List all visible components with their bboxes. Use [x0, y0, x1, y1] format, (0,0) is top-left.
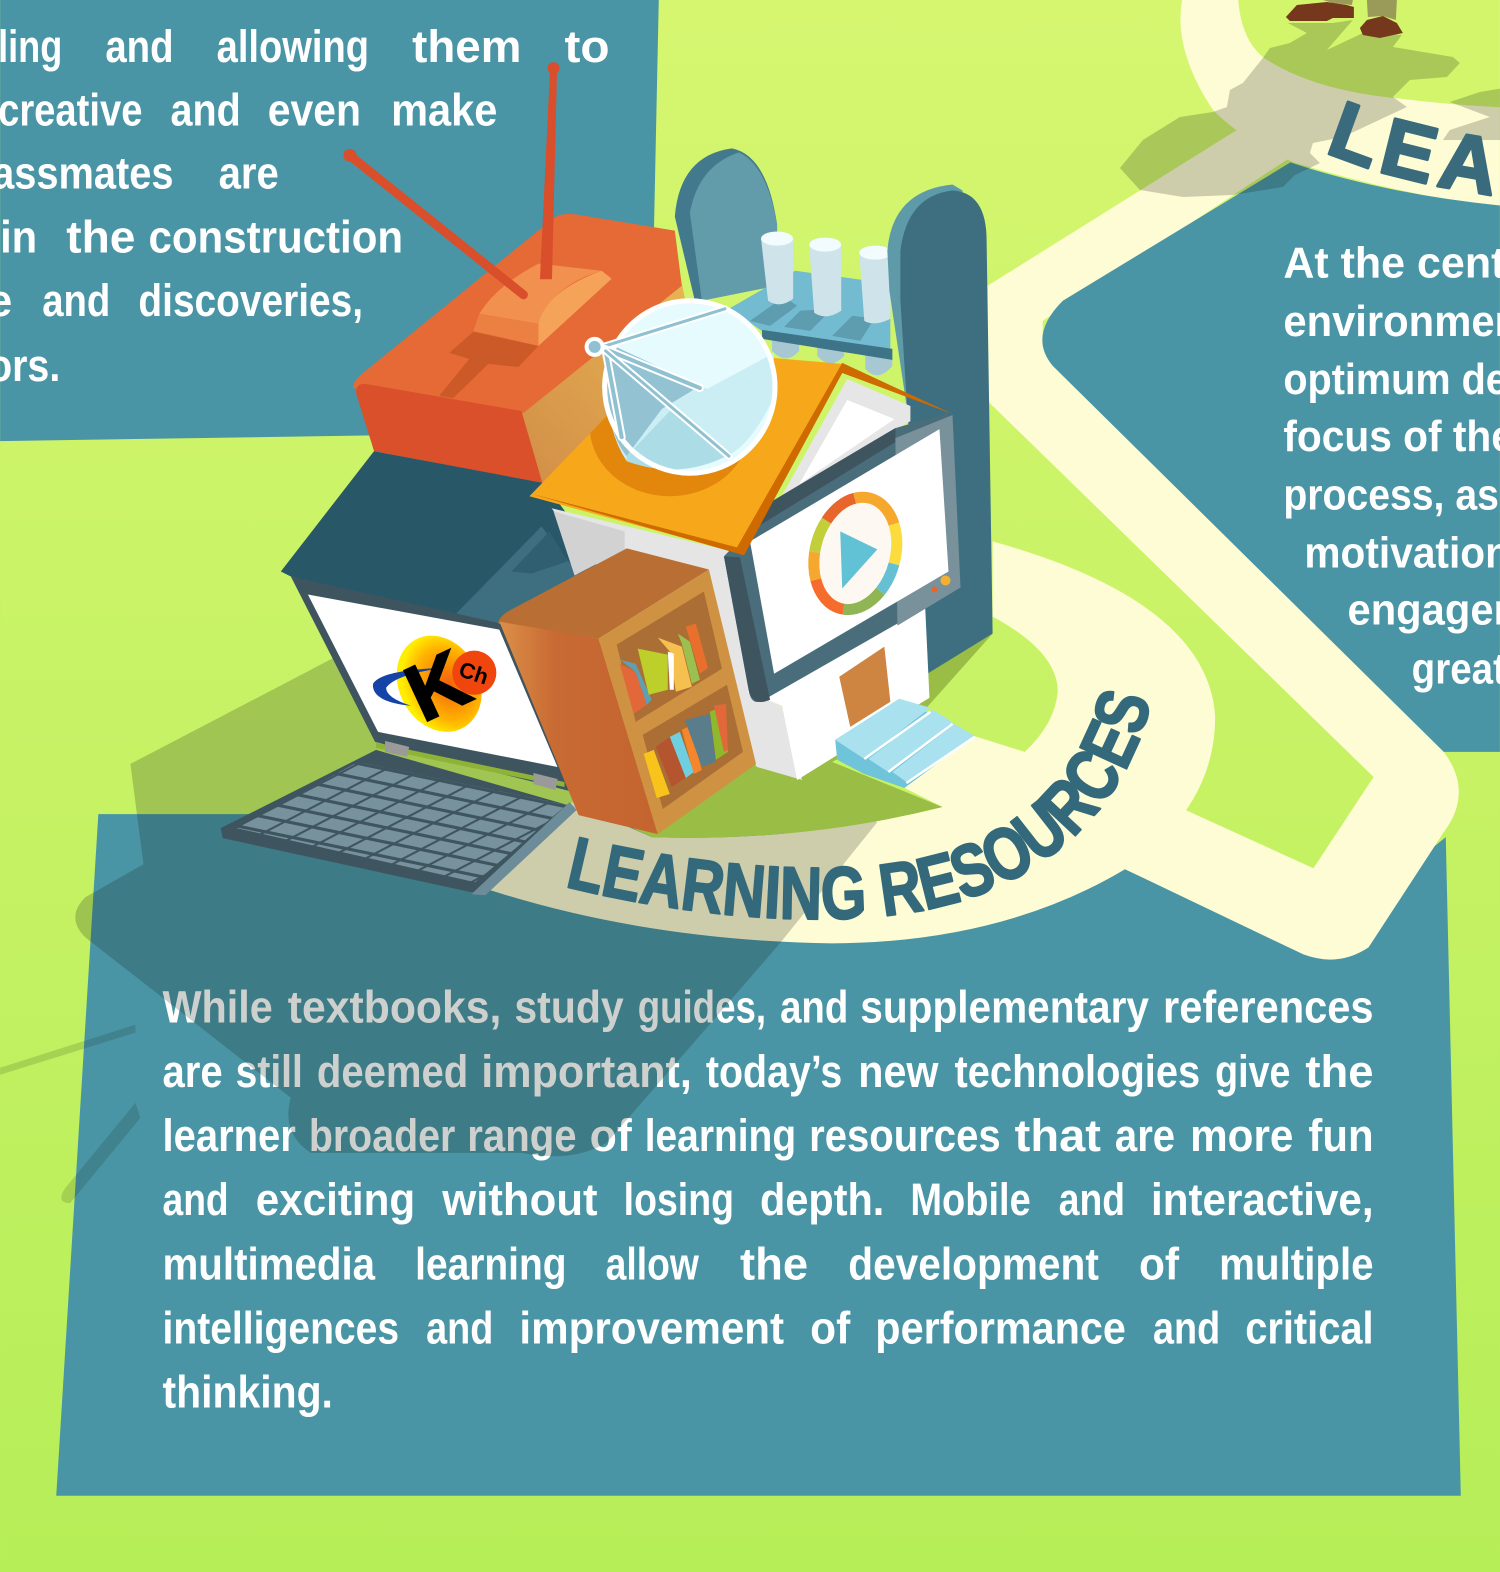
text: bottom paragraph: new [858, 1046, 939, 1097]
KCh logo [373, 621, 498, 747]
text: bottom paragraph: still [236, 1046, 303, 1097]
text: bottom paragraph: allow [606, 1238, 700, 1289]
text: top-left paragraph: and [105, 21, 174, 72]
door [839, 647, 890, 727]
text: bottom paragraph: more [1190, 1110, 1293, 1161]
text: bottom paragraph: without [441, 1174, 598, 1225]
antennas [343, 62, 560, 295]
laptop keyboard [221, 741, 577, 895]
orange roof [529, 356, 953, 555]
panel: bottom text background [56, 814, 1461, 1496]
text: bottom paragraph: learner [163, 1110, 296, 1161]
orange tv box on top [353, 214, 692, 483]
text: bottom paragraph: thinking. [163, 1367, 333, 1418]
text: top-left paragraph: them [412, 21, 521, 72]
text: top-left paragraph: allowing [217, 21, 369, 72]
panel: right text background [1042, 162, 1500, 752]
text: bottom paragraph: and [426, 1302, 493, 1353]
text: bottom paragraph: are [1115, 1110, 1175, 1161]
panel: top-left text background [0, 0, 659, 441]
text: bottom paragraph: depth. [760, 1174, 884, 1225]
text: bottom paragraph: of [810, 1302, 851, 1353]
text: top-left paragraph: make [391, 84, 497, 135]
house walls [551, 508, 929, 780]
text: bottom paragraph: deemed [317, 1046, 468, 1097]
text: bottom paragraph: give [1215, 1046, 1290, 1097]
text: bottom paragraph: the [1305, 1046, 1374, 1097]
KCh logo: K [392, 632, 482, 738]
figure shadow on the ground [1120, 20, 1500, 197]
back right tower [887, 184, 993, 682]
text: bottom paragraph: intelligences [163, 1302, 399, 1353]
text: bottom paragraph: range [467, 1110, 577, 1161]
text: bottom paragraph: guides, [638, 982, 766, 1033]
text: bottom paragraph: multiple [1219, 1238, 1374, 1289]
text: bottom paragraph: of [590, 1110, 633, 1161]
text: bottom paragraph: study [514, 982, 624, 1033]
building shadow [0, 657, 877, 1203]
text: bottom paragraph: the [740, 1238, 808, 1289]
play icon [802, 488, 909, 619]
text: bottom paragraph: and [1059, 1174, 1125, 1225]
winding cream path [481, 0, 1500, 960]
text: top-left paragraph: construction [148, 212, 403, 263]
text: top-left paragraph: and [42, 275, 110, 326]
laptop screen [291, 576, 574, 792]
dark laptop lid back [281, 451, 602, 632]
building illustration [221, 62, 993, 895]
text: bottom paragraph: fun [1308, 1110, 1374, 1161]
text: top-left paragraph: even [268, 84, 361, 135]
text: top-left paragraph: to [565, 21, 610, 72]
text: bottom paragraph: learning [645, 1110, 796, 1161]
gable [782, 379, 910, 495]
wall screen [724, 413, 961, 702]
text: bottom paragraph: development [848, 1238, 1099, 1289]
text: top-left paragraph: ling [0, 21, 62, 72]
person's feet [1286, 0, 1403, 38]
text: top-left paragraph [0, 21, 610, 391]
text: bottom paragraph: improvement [519, 1302, 784, 1353]
text: top-left paragraph: and [171, 84, 241, 135]
steps [835, 699, 975, 788]
text: bottom paragraph: interactive, [1151, 1174, 1374, 1225]
text: bottom paragraph: broader [309, 1110, 455, 1161]
curved heading: LEARNING RESOURCES: LEARNING RESOURCES [567, 690, 1150, 920]
text: bottom paragraph: critical [1245, 1302, 1374, 1353]
text: top-left paragraph: creative [0, 84, 142, 135]
text: top-left paragraph: in [0, 212, 37, 263]
text: bottom paragraph: losing [624, 1174, 734, 1225]
text: bottom paragraph: Mobile [910, 1174, 1031, 1225]
text: top-left paragraph: are [219, 147, 279, 198]
back left arch [675, 148, 777, 301]
text: bottom paragraph: important, [481, 1046, 692, 1097]
play triangle [840, 531, 877, 588]
text: bottom paragraph: learning [415, 1238, 567, 1289]
text: bottom paragraph: and [163, 1174, 229, 1225]
green circle around the figure [1238, 0, 1500, 107]
text: bottom paragraph: today’s [706, 1046, 842, 1097]
text: bottom paragraph: and [780, 982, 848, 1033]
text: top-left paragraph: the [66, 212, 135, 263]
KCh logo: Ch [456, 657, 492, 690]
text: bottom paragraph: exciting [256, 1174, 415, 1225]
text: bottom paragraph: resources [809, 1110, 1001, 1161]
text: bottom paragraph: references [1163, 982, 1374, 1033]
text: right paragraph [1283, 240, 1500, 694]
text: bottom paragraph: and [1153, 1302, 1220, 1353]
text: top-left paragraph: discoveries, [138, 275, 363, 326]
text: bottom paragraph: textbooks, [288, 982, 501, 1033]
text: bottom paragraph [163, 982, 1374, 1418]
text: bottom paragraph: multimedia [163, 1238, 376, 1289]
text: bottom paragraph: While [163, 982, 273, 1033]
text: bottom paragraph: performance [875, 1302, 1126, 1353]
text: bottom paragraph: that [1015, 1110, 1101, 1161]
text: bottom paragraph: supplementary [860, 982, 1149, 1033]
ground shade under building [577, 634, 993, 838]
text: bottom paragraph: of [1139, 1238, 1180, 1289]
bookshelf [498, 548, 756, 834]
shelf with test tubes [729, 232, 892, 375]
text: bottom paragraph: technologies [955, 1046, 1200, 1097]
satellite dish [587, 301, 775, 473]
text: bottom paragraph: are [163, 1046, 223, 1097]
